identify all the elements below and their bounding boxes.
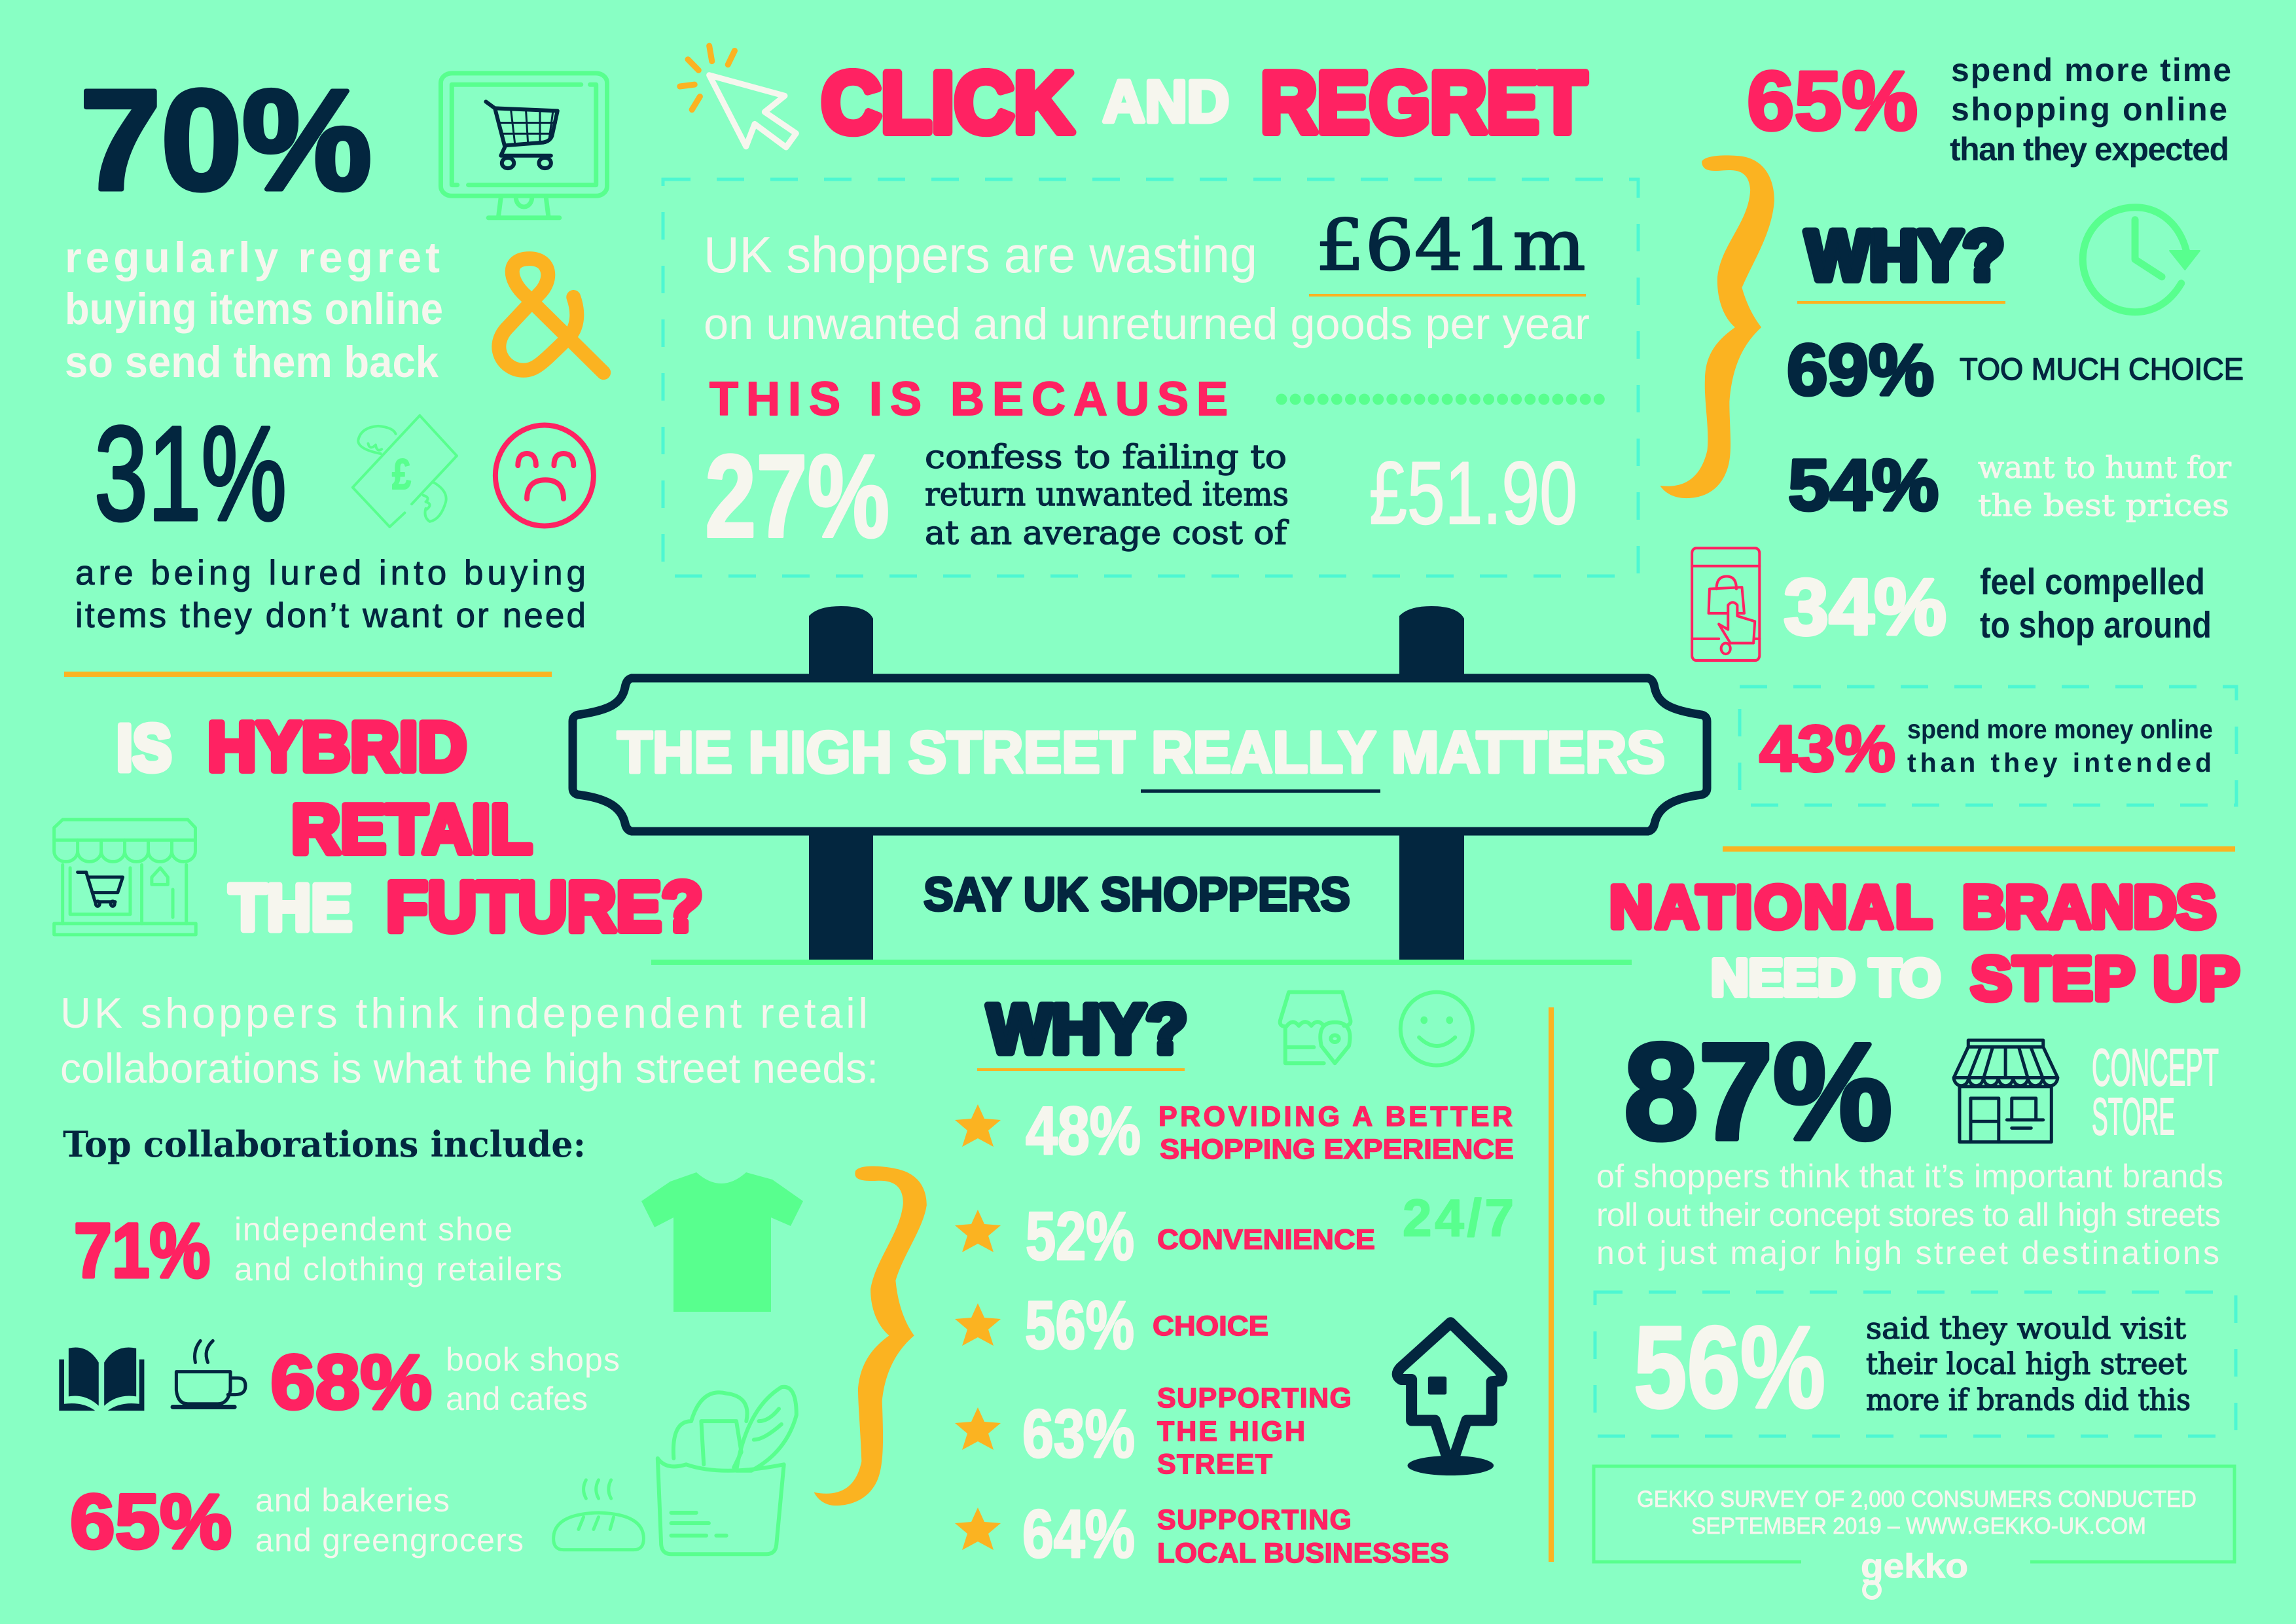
text: lured into buying: are being lured into buying <box>75 554 586 592</box>
list row: supporting local businesses <box>955 1496 1449 1572</box>
icon: flying money: £ <box>392 450 411 498</box>
text: regularly regret <box>65 233 443 387</box>
text: UK shoppers think: UK shoppers think independent retail <box>60 989 868 1037</box>
logo: gekko <box>1861 1547 1968 1598</box>
icon: bread <box>554 1480 643 1550</box>
heading: national brands need to step up: NEED TO <box>1711 948 1941 1007</box>
dotted rule <box>1282 394 1600 405</box>
text: UK shoppers are wasting: UK shoppers are wasting <box>704 226 1257 283</box>
heading: why: WHY? <box>1806 216 2004 295</box>
source box <box>1594 1466 2234 1562</box>
list row: supporting high street: THE HIGH <box>1157 1416 1305 1447</box>
text: spend more time: shopping online <box>1951 91 2227 128</box>
icon: concept store <box>1954 1040 2058 1142</box>
icon: store location <box>1280 992 1350 1063</box>
source box: SEPTEMBER 2019 – WWW.GEKKO-UK.COM <box>1691 1513 2146 1539</box>
dashed panel: 56%: more if brands did this <box>1866 1382 2191 1417</box>
stat: 27%: 27% <box>705 431 889 562</box>
text: spend more time: spend more time <box>1951 52 2231 88</box>
dashed panel: 43% <box>1740 687 2236 805</box>
stat: 70%: 70% <box>80 61 372 220</box>
panel: click and regret <box>663 46 1638 576</box>
list row: supporting high street: SUPPORTING <box>1157 1382 1352 1414</box>
stat row: too much choice: 69% <box>1787 330 1934 410</box>
label: concept store: STORE <box>2092 1087 2175 1146</box>
dashed panel: 43%: spend more money online <box>1907 714 2213 744</box>
icon: t-shirt <box>641 1172 803 1312</box>
stat row: book shops and cafes: and cafes <box>446 1380 588 1417</box>
dashed panel: 56%: 56% <box>1634 1302 1825 1432</box>
sign board <box>573 678 1707 831</box>
text: confess to failing: confess to failing to <box>925 438 1287 476</box>
text: lured into buying: items they don’t want or need <box>75 596 586 635</box>
stat row: bakeries and greengrocers: and greengrocers <box>255 1522 524 1559</box>
brace: top right <box>1660 155 1774 498</box>
panel: 65% spend more time <box>1660 52 2244 805</box>
dashed panel: 56%: said they would visit <box>1866 1311 2186 1346</box>
heading: national brands need to step up: NATIONAL <box>1609 874 1932 941</box>
stat row: shoe and clothing: 71% <box>74 1208 210 1294</box>
stat: 65%: 65% <box>1747 54 1918 148</box>
text: UK shoppers think: collaborations is what the high street needs: <box>60 1045 878 1092</box>
icon: book <box>59 1347 144 1411</box>
stat row: hunt for best prices: want to hunt for <box>1978 450 2231 485</box>
heading: national brands need to step up: STEP UP <box>1971 944 2240 1013</box>
subheading: top collaborations: Top collaborations include: <box>63 1123 586 1165</box>
heading: national brands need to step up: BRANDS <box>1962 874 2216 941</box>
icon: phone shopping <box>1692 548 1759 660</box>
list row: supporting high street: STREET <box>1157 1449 1272 1480</box>
list row: better experience <box>955 1093 1514 1169</box>
stat row: hunt for best prices: the best prices <box>1978 488 2229 523</box>
stat row: book shops and cafes <box>270 1339 620 1426</box>
panel: why high street <box>955 991 1514 1572</box>
dashed panel: 56% <box>1595 1292 2236 1436</box>
list row: better experience: SHOPPING EXPERIENCE <box>1160 1134 1514 1165</box>
text: UK shoppers think <box>60 989 878 1092</box>
text: confess to failing <box>925 438 1289 552</box>
stat row: book shops and cafes: book shops <box>446 1341 620 1378</box>
list row: supporting high street: 63% <box>1022 1396 1135 1472</box>
list row: supporting local businesses: SUPPORTING <box>1157 1504 1352 1536</box>
stat row: compelled to shop: to shop around <box>1980 604 2212 646</box>
stat: 31%: 31% <box>94 399 287 549</box>
heading: is hybrid retail the future: THE <box>229 871 352 945</box>
icon: sad face <box>495 425 594 526</box>
heading: is hybrid retail the future: RETAIL <box>291 791 532 868</box>
panel: sign post <box>573 606 1707 965</box>
title <box>821 54 1587 151</box>
list row: convenience: 52% <box>1026 1199 1134 1274</box>
text: unwanted goods: on unwanted and unreturned goods per year <box>704 299 1590 349</box>
stat row: compelled to shop: feel compelled <box>1980 561 2205 603</box>
heading: is hybrid retail the future <box>117 708 703 946</box>
list row: supporting local businesses: 64% <box>1022 1496 1135 1572</box>
text: shoppers think: not just major high street destinations <box>1596 1235 2219 1271</box>
heading: is hybrid retail the future: IS <box>117 712 171 785</box>
icon: monitor with cart <box>440 73 607 218</box>
stat: £641m: £641m <box>1316 205 1586 287</box>
heading: national brands need to step up <box>1609 874 2240 1013</box>
icon: ampersand <box>499 259 603 372</box>
list row: better experience: PROVIDING A BETTER <box>1158 1101 1513 1132</box>
text: regularly regret: so send them back <box>65 337 439 387</box>
stat: £51.90: £51.90 <box>1369 443 1577 543</box>
icon: house pin <box>1397 1323 1502 1475</box>
heading: is hybrid retail the future: HYBRID <box>207 708 467 785</box>
text: spend more time <box>1950 52 2231 168</box>
heading: the high street really matters: THE HIGH STREET REALLY MATTERS <box>617 720 1665 785</box>
icon: grocery bag <box>658 1387 797 1554</box>
heading: why: WHY? <box>988 991 1187 1068</box>
label: concept store <box>2092 1038 2219 1146</box>
list row: supporting local businesses: LOCAL BUSINESSES <box>1157 1538 1449 1569</box>
title: REGRET <box>1261 54 1587 151</box>
text: regularly regret: regularly regret <box>65 233 440 281</box>
stat row: book shops and cafes: 68% <box>270 1339 432 1426</box>
dashed panel: 56%: their local high street <box>1866 1346 2187 1381</box>
icon: clock <box>2083 208 2200 312</box>
icon: cursor click <box>680 46 796 147</box>
panel: hybrid retail <box>54 708 927 1565</box>
title: CLICK <box>821 54 1073 151</box>
list row: choice: CHOICE <box>1153 1310 1268 1342</box>
heading: this is because: THIS IS BECAUSE <box>709 373 1228 425</box>
text: say UK shoppers: SAY UK SHOPPERS <box>924 869 1350 921</box>
source box: GEKKO SURVEY OF 2,000 CONSUMERS CONDUCTED <box>1637 1487 2197 1512</box>
list row: choice: 56% <box>1025 1288 1134 1363</box>
dashed panel: 43%: 43% <box>1759 712 1895 785</box>
stat row: compelled to shop: 34% <box>1784 562 1946 651</box>
dashed panel: wasted money <box>663 179 1638 576</box>
stat row: bakeries and greengrocers <box>70 1479 524 1565</box>
icon: coffee cup <box>173 1341 245 1407</box>
stat row: shoe and clothing <box>74 1208 562 1294</box>
logo: gekko: gekko <box>1861 1547 1968 1585</box>
icon: smiley <box>1401 992 1473 1066</box>
stat row: too much choice: TOO MUCH CHOICE <box>1960 352 2244 386</box>
stat row: bakeries and greengrocers: 65% <box>70 1479 232 1565</box>
list row: convenience: CONVENIENCE <box>1157 1224 1375 1255</box>
sign posts <box>809 606 1464 960</box>
stat row: hunt for best prices <box>1788 445 2231 526</box>
text: lured into buying <box>75 554 586 635</box>
text: regularly regret: buying items online <box>65 284 443 334</box>
brace: lower middle <box>814 1166 927 1506</box>
list row: choice <box>955 1288 1268 1363</box>
stat row: hunt for best prices: 54% <box>1788 445 1939 526</box>
stat row: too much choice <box>1787 330 2244 410</box>
dashed panel: 43%: than they intended <box>1907 748 2212 778</box>
stat: 87%: 87% <box>1624 1015 1892 1168</box>
stat row: bakeries and greengrocers: and bakeries <box>255 1482 450 1519</box>
text: confess to failing: at an average cost of <box>925 514 1289 552</box>
panel: national brands <box>1594 874 2240 1598</box>
text: shoppers think: roll out their concept stores to all high streets <box>1596 1197 2221 1233</box>
icon: shop with cart <box>54 820 196 935</box>
heading: is hybrid retail the future: FUTURE? <box>386 867 703 946</box>
text: confess to failing: return unwanted items <box>925 475 1289 513</box>
text: shoppers think: of shoppers think that it’s important brands <box>1596 1158 2223 1195</box>
stat row: compelled to shop <box>1784 561 2212 651</box>
panel: 70% regret <box>65 61 607 635</box>
title: AND <box>1103 69 1229 135</box>
text: shoppers think <box>1596 1158 2223 1271</box>
text: spend more time: than they expected <box>1950 131 2229 168</box>
stat row: shoe and clothing: independent shoe <box>234 1211 512 1248</box>
stat row: shoe and clothing: and clothing retailers <box>234 1251 562 1288</box>
list row: convenience <box>955 1199 1375 1274</box>
icon: flying money <box>353 416 457 527</box>
list row: better experience: 48% <box>1026 1093 1141 1169</box>
list row: supporting high street <box>955 1382 1352 1480</box>
label: 24/7: 24/7 <box>1403 1189 1514 1247</box>
